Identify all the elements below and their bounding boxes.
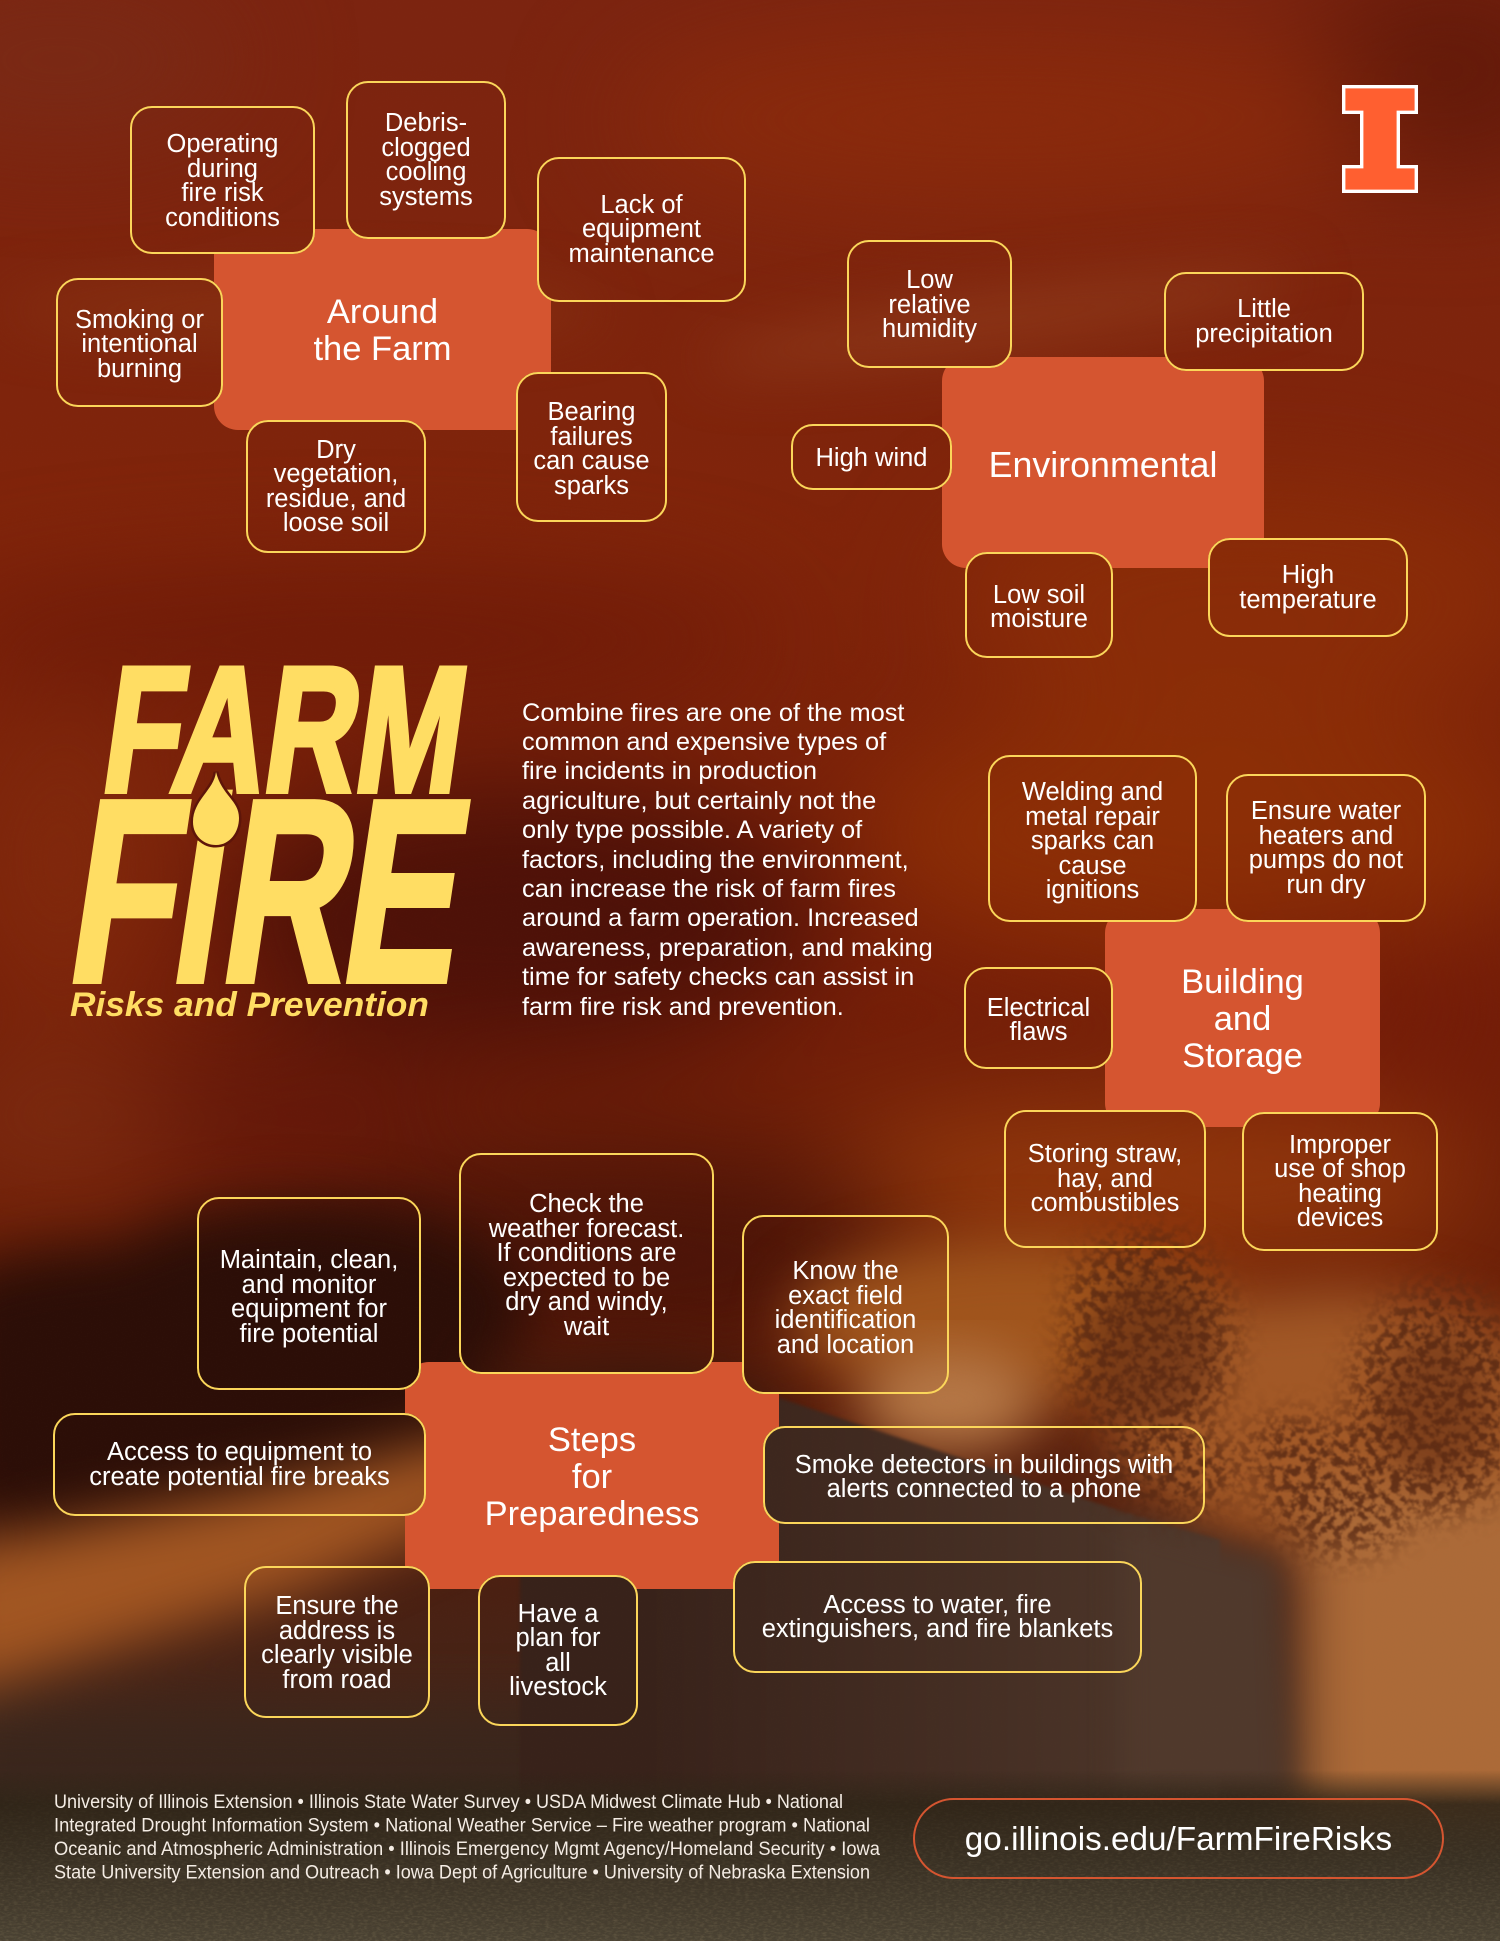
heading tile: building and storage: Storage [1182,1037,1303,1075]
box: little precipitation: precipitation [1195,320,1333,348]
box: bearing failures can cause sparks [516,372,667,522]
intro paragraph: awareness, preparation, and making [522,934,933,962]
box: know the exact field identification: Know the [792,1257,899,1285]
url pill: go.illinois.edu/FarmFireRisks [965,1820,1392,1858]
box: low soil moisture: moisture [990,605,1088,633]
intro paragraph: only type possible. A variety of [522,816,862,844]
box: ensure water heaters and pumps: heaters and [1259,822,1393,850]
box: ensure the address is visible: address is [279,1616,395,1644]
box: improper use of shop heating devices [1242,1112,1438,1251]
box: debris-clogged cooling systems [346,81,506,239]
heading tile: around the farm: Around [327,293,438,331]
box: access to water and extinguishers: Access to water, fire [823,1590,1052,1618]
box: know the exact field identification [742,1215,949,1394]
box: smoke detectors: Smoke detectors in buildings with [795,1450,1173,1478]
box: ensure the address is visible: from road [282,1666,392,1694]
panel: environmental [791,240,1408,658]
box: lack of equipment maintenance: equipment [582,215,701,243]
intro paragraph: common and expensive types of [522,728,886,756]
box: ensure the address is visible [244,1566,430,1718]
box: lack of equipment maintenance: Lack of [600,191,683,219]
heading tile: building and storage: Building [1181,963,1304,1001]
box: ensure water heaters and pumps: pumps do not [1249,846,1403,874]
box: little precipitation [1164,272,1364,371]
box: ensure water heaters and pumps [1226,774,1426,922]
box: check the weather forecast [459,1153,714,1374]
box: improper use of shop heating devices: heating [1298,1180,1382,1208]
box: maintain, clean, and monitor equipment [197,1197,421,1390]
box: electrical flaws: flaws [1009,1018,1068,1046]
intro paragraph: fire incidents in production [522,757,817,785]
box: operating during fire risk conditions: Operating [166,130,278,158]
box: access to equipment for fire breaks [53,1413,426,1516]
box: dry vegetation, residue, and loose soil [246,420,426,553]
panel: around the farm [56,81,746,553]
box: access to water and extinguishers [733,1561,1142,1673]
box: dry vegetation, residue, and loose soil: residue, and [266,484,406,512]
url pill [913,1798,1444,1879]
box: access to water and extinguishers: extinguishers, and fire blankets [762,1615,1113,1643]
box: bearing failures can cause sparks: Bearing [548,398,635,426]
box: bearing failures can cause sparks: can cause [533,447,650,475]
box: access to equipment for fire breaks: create potential fire breaks [89,1462,390,1490]
panel: steps for preparedness [53,1153,1205,1726]
icon: flame dot of the i [193,772,239,845]
footer: partner credits: Integrated Drought Information System • National Weather Service – Fire weather program • National [54,1816,870,1836]
box: ensure the address is visible: Ensure the [275,1592,399,1620]
box: have a plan for all livestock [478,1575,638,1726]
box: high temperature: temperature [1239,586,1377,614]
box: storing straw, hay, and combustibles: Storing straw, [1028,1140,1182,1168]
box: smoke detectors: alerts connected to a phone [827,1475,1141,1503]
box: smoking or intentional burning: Smoking or [75,306,204,334]
box: ensure water heaters and pumps: run dry [1286,870,1366,898]
box: maintain, clean, and monitor equipment: equipment for [231,1295,387,1323]
box: welding and metal repair sparks [988,755,1197,922]
box: check the weather forecast: wait [564,1312,609,1340]
box: bearing failures can cause sparks: sparks [554,472,629,500]
box: check the weather forecast: dry and windy, [505,1288,668,1316]
intro paragraph: agriculture, but certainly not the [522,787,876,815]
box: little precipitation: Little [1237,295,1291,323]
box: check the weather forecast: Check the [529,1190,644,1218]
box: know the exact field identification: identification [775,1306,916,1334]
box: welding and metal repair sparks: metal repair [1025,803,1160,831]
box: high wind: High wind [816,444,927,472]
trees [1065,1230,1500,1555]
box: smoking or intentional burning [56,278,223,407]
heading tile: around the farm: the Farm [313,330,452,368]
heading tile: steps for preparedness: for [572,1458,612,1496]
heading tile: building and storage: and [1214,1000,1271,1038]
footer: partner credits: Oceanic and Atmospheric Administration • Illinois Emergency Mgmt Agency/Homeland Security • Iowa [54,1839,880,1860]
box: improper use of shop heating devices: devices [1297,1204,1383,1232]
box: smoking or intentional burning: burning [97,355,182,383]
box: high wind [791,424,952,490]
logo: block I [1342,85,1418,193]
barn silhouette [520,1398,1290,1810]
box: storing straw, hay, and combustibles [1004,1110,1206,1248]
title: Farm Fire Risks and Prevention [60,655,480,1030]
box: maintain, clean, and monitor equipment: and monitor [242,1270,376,1298]
box: know the exact field identification: and location [777,1330,914,1358]
box: dry vegetation, residue, and loose soil: Dry [316,436,356,464]
box: electrical flaws: Electrical [987,994,1090,1022]
box: know the exact field identification: exact field [788,1282,903,1310]
heading tile: around the farm [214,229,551,430]
box: low relative humidity: humidity [882,315,977,343]
box: maintain, clean, and monitor equipment: Maintain, clean, [220,1246,398,1274]
intro paragraph: around a farm operation. Increased [522,904,919,932]
box: operating during fire risk conditions: conditions [165,204,280,232]
box: debris-clogged cooling systems: cooling [386,158,466,186]
box: operating during fire risk conditions: fire risk [181,179,264,207]
box: improper use of shop heating devices: Improper [1289,1130,1391,1158]
box: check the weather forecast: weather forecast. [489,1214,684,1242]
box: low soil moisture: Low soil [993,580,1085,608]
box: improper use of shop heating devices: use of shop [1274,1155,1406,1183]
box: smoking or intentional burning: intentional [81,330,198,358]
box: lack of equipment maintenance [537,157,746,302]
box: low relative humidity: relative [888,291,971,319]
box: dry vegetation, residue, and loose soil: vegetation, [274,460,398,488]
subtitle: Risks and Prevention [70,986,429,1024]
box: operating during fire risk conditions [130,106,315,254]
box: have a plan for all livestock: livestock [509,1673,607,1701]
box: debris-clogged cooling systems: systems [379,182,473,210]
box: welding and metal repair sparks: sparks can [1031,827,1154,855]
box: welding and metal repair sparks: cause [1058,852,1127,880]
intro paragraph: can increase the risk of farm fires [522,875,896,903]
intro paragraph [522,698,933,1021]
heading tile: steps for preparedness: Preparedness [485,1494,699,1532]
box: ensure water heaters and pumps: Ensure water [1251,797,1401,825]
intro paragraph: time for safety checks can assist in [522,963,914,991]
box: smoke detectors [763,1426,1205,1524]
heading tile: steps for preparedness [405,1362,779,1589]
box: lack of equipment maintenance: maintenance [568,240,714,268]
heading tile: building and storage [1105,909,1380,1127]
box: operating during fire risk conditions: during [187,154,258,182]
box: low relative humidity [847,240,1012,368]
heading tile: environmental: Environmental [989,444,1217,484]
footer: partner credits [54,1792,880,1884]
panel: building and storage [964,755,1438,1251]
intro paragraph: Combine fires are one of the most [522,698,904,726]
box: low relative humidity: Low [906,266,953,294]
box: check the weather forecast: expected to be [503,1264,670,1292]
intro paragraph: farm fire risk and prevention. [522,993,844,1021]
footer: partner credits: University of Illinois Extension • Illinois State Water Survey • USDA Midwest Climate Hub • National [54,1792,843,1813]
box: check the weather forecast: If conditions are [496,1239,676,1267]
box: bearing failures can cause sparks: failures [550,422,633,450]
box: high temperature [1208,538,1408,637]
intro paragraph: factors, including the environment, [522,846,909,874]
box: storing straw, hay, and combustibles: combustibles [1031,1189,1179,1217]
grass field [0,1770,1500,1941]
box: electrical flaws [964,967,1113,1069]
box: access to equipment for fire breaks: Access to equipment to [107,1438,372,1466]
box: storing straw, hay, and combustibles: hay, and [1057,1165,1153,1193]
box: debris-clogged cooling systems: clogged [381,134,471,162]
box: have a plan for all livestock: Have a [518,1600,598,1628]
box: maintain, clean, and monitor equipment: fire potential [240,1320,378,1348]
box: debris-clogged cooling systems: Debris- [385,109,467,137]
heading tile: environmental [942,357,1264,568]
box: welding and metal repair sparks: Welding and [1022,778,1163,806]
box: ensure the address is visible: clearly visible [261,1641,413,1669]
box: dry vegetation, residue, and loose soil: loose soil [283,509,389,537]
box: have a plan for all livestock: all [545,1648,571,1676]
box: welding and metal repair sparks: ignitions [1046,876,1139,904]
box: low soil moisture [965,552,1113,658]
box: high temperature: High [1282,561,1334,589]
box: have a plan for all livestock: plan for [515,1624,601,1652]
heading tile: steps for preparedness: Steps [548,1420,636,1458]
